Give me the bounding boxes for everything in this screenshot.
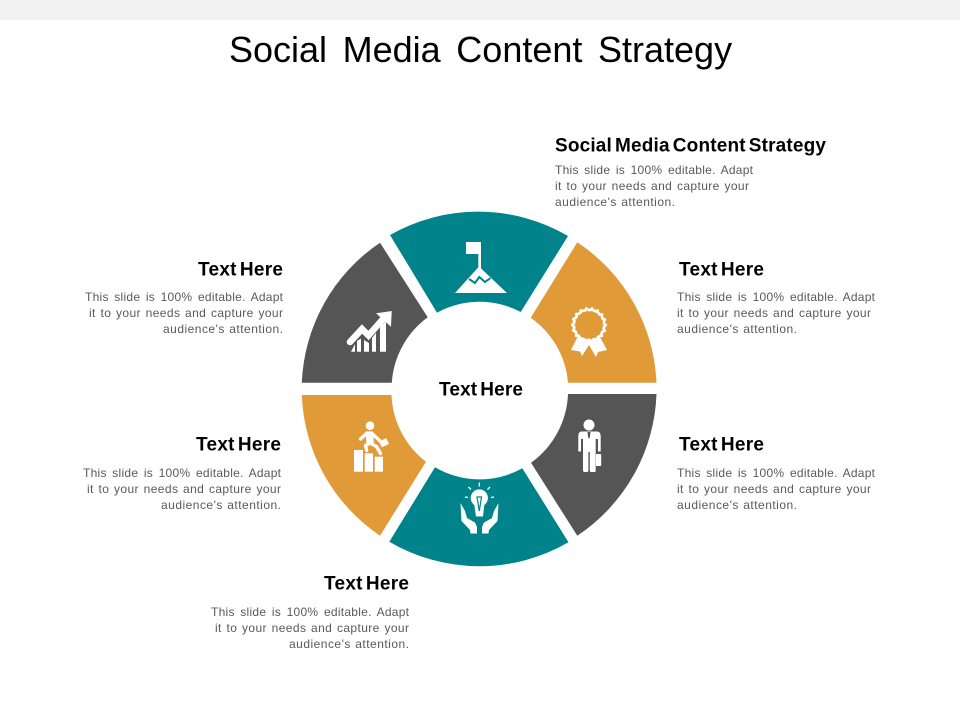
top grey band: [0, 0, 960, 20]
heading: Social Media Content Strategy: [555, 136, 826, 156]
segment: lower right grey: [531, 394, 656, 536]
heading: Text Here: [198, 260, 283, 280]
icon: climbing steps with briefcase: [354, 421, 389, 472]
text block: top: [555, 136, 826, 209]
body: it to your needs and capture your: [87, 482, 281, 496]
body: it to your needs and capture your: [677, 306, 871, 320]
text block: bottom: [211, 574, 410, 651]
body: it to your needs and capture your: [677, 482, 871, 496]
segment: top teal: [390, 212, 568, 313]
body: This slide is 100% editable. Adapt: [677, 290, 876, 304]
body: it to your needs and capture your: [89, 306, 283, 320]
body: [83, 466, 282, 512]
icon: businessman with briefcase: [578, 420, 601, 472]
text block: right lower: [677, 434, 876, 512]
body: This slide is 100% editable. Adapt: [83, 466, 282, 480]
body: it to your needs and capture your: [555, 179, 749, 193]
body: This slide is 100% editable. Adapt: [677, 466, 876, 480]
body: [677, 290, 876, 336]
heading: Text Here: [196, 434, 281, 456]
segment: upper left grey: [302, 243, 428, 383]
body: [85, 290, 284, 336]
body: audience's attention.: [677, 322, 797, 336]
donut ring chart: [302, 212, 656, 566]
body: it to your needs and capture your: [215, 621, 409, 635]
body: [211, 605, 410, 651]
body: This slide is 100% editable. Adapt: [211, 605, 410, 619]
heading: Text Here: [324, 574, 409, 594]
segment: bottom teal: [389, 467, 568, 566]
icon: flag on mountain: [455, 242, 507, 293]
text block: left upper: [85, 260, 284, 336]
body: audience's attention.: [163, 322, 283, 336]
body: audience's attention.: [555, 195, 675, 209]
body: [555, 163, 754, 209]
title: Social Media Content Strategy: [229, 29, 732, 70]
heading: Text Here: [679, 260, 764, 280]
icon: light bulb in hands: [460, 482, 498, 534]
center label: Text Here: [439, 380, 523, 400]
segment: lower left orange: [302, 395, 426, 536]
text block: left lower: [83, 434, 282, 512]
body: This slide is 100% editable. Adapt: [85, 290, 284, 304]
body: audience's attention.: [677, 498, 797, 512]
body: audience's attention.: [289, 637, 409, 651]
icon: rising chart arrow: [350, 311, 392, 352]
heading: Text Here: [679, 434, 764, 456]
body: [677, 466, 876, 512]
icon: ribbon badge: [571, 308, 607, 357]
body: This slide is 100% editable. Adapt: [555, 163, 754, 177]
segment: upper right orange: [531, 242, 656, 383]
body: audience's attention.: [161, 498, 281, 512]
text block: right upper: [677, 260, 876, 336]
